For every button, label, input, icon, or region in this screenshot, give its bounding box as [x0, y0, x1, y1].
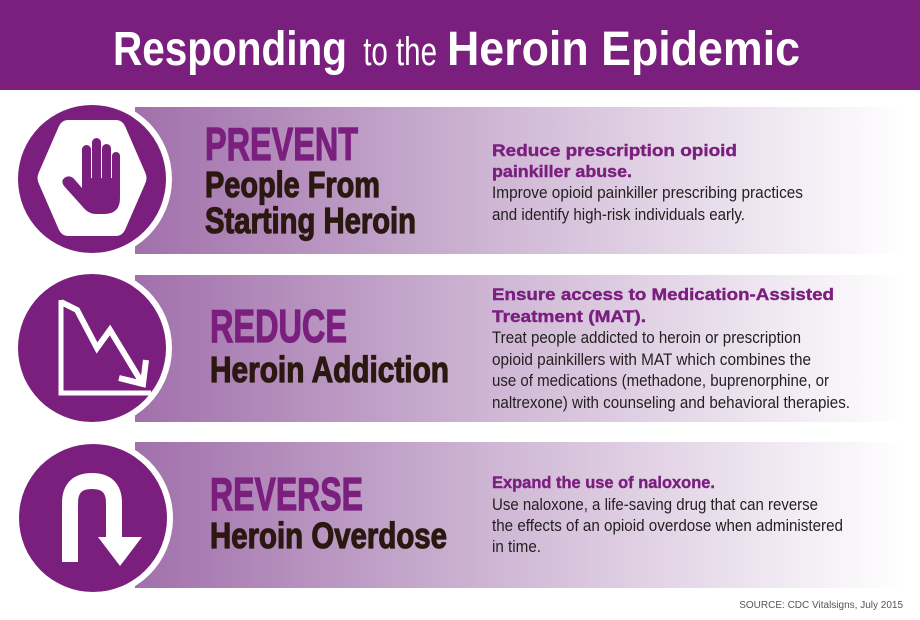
text: reduce description: Treatment (MAT). — [492, 307, 646, 326]
text: reduce description: opioid painkillers with MAT which combines the — [492, 350, 811, 369]
text: prevent description: painkiller abuse. — [492, 162, 632, 181]
heading: prevent: Starting Heroin — [205, 200, 416, 241]
source note: SOURCE: CDC Vitalsigns, July 2015 — [739, 600, 903, 611]
heading: reduce: REDUCE — [210, 300, 347, 352]
text: reduce description: Treat people addicted to heroin or prescription — [492, 328, 801, 347]
text: reverse description: Use naloxone, a life-saving drug that can reverse — [492, 495, 818, 514]
title: Heroin Epidemic — [447, 23, 800, 76]
icon: declining chart — [12, 268, 172, 428]
heading: reverse: REVERSE — [210, 468, 363, 520]
text: prevent description: Improve opioid painkiller prescribing practices — [492, 183, 803, 202]
heading: prevent: PREVENT — [205, 118, 358, 170]
text: reverse description: Expand the use of naloxone. — [492, 473, 715, 492]
text: reverse description: the effects of an opioid overdose when administered — [492, 516, 843, 535]
panel: reverse — [13, 438, 905, 598]
header banner — [0, 0, 920, 90]
heading: reverse: Heroin Overdose — [210, 515, 447, 556]
text: reverse description: in time. — [492, 537, 541, 556]
icon: stop hand — [12, 99, 172, 259]
title: Responding — [113, 23, 347, 76]
icon: u-turn arrow — [13, 438, 173, 598]
heading: prevent: People From — [205, 164, 380, 205]
text: prevent description: Reduce prescription opioid — [492, 141, 737, 160]
text: reduce description: naltrexone) with counseling and behavioral therapies. — [492, 393, 850, 412]
text: reduce description: use of medications (methadone, buprenorphine, or — [492, 371, 829, 390]
text: prevent description: and identify high-risk individuals early. — [492, 205, 745, 224]
panel: reduce — [12, 268, 905, 428]
panel: prevent — [12, 99, 905, 259]
text: reduce description: Ensure access to Medication-Assisted — [492, 285, 834, 304]
title: to the — [355, 30, 437, 74]
heading: reduce: Heroin Addiction — [210, 349, 449, 390]
